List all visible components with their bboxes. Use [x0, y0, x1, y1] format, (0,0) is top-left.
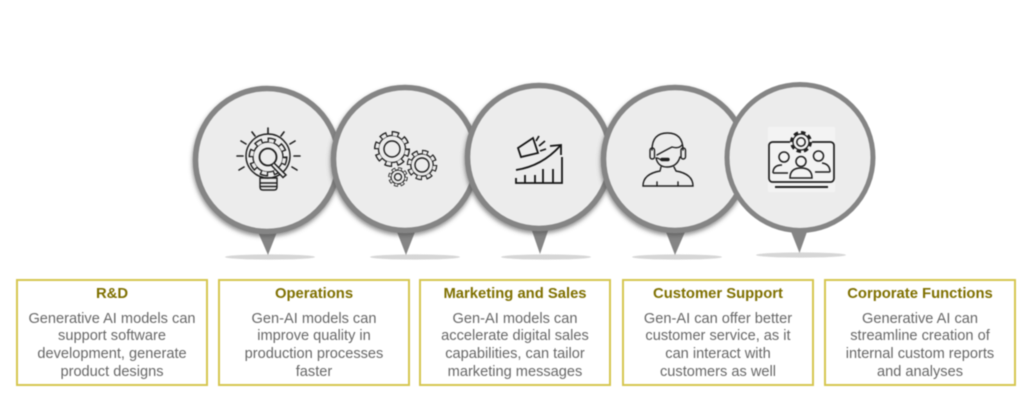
text: Corporate Functions description: and analyses — [877, 364, 963, 380]
text: R&D description — [28, 310, 196, 380]
heading: Operations: Operations — [275, 286, 353, 302]
pin 3: Marketing and Sales — [468, 86, 610, 260]
text: Customer Support description: customer service, as it — [645, 328, 791, 344]
card: R&D — [16, 279, 208, 386]
text: Operations description — [244, 310, 384, 380]
text: Operations description: faster — [296, 364, 332, 380]
pin 2: Operations — [334, 88, 476, 260]
icon: light bulb with gear and magnifier — [237, 128, 300, 190]
text: Corporate Functions description: Generative AI can — [862, 310, 978, 326]
text: R&D description: development, generate — [37, 346, 187, 362]
pin 5: Corporate Functions — [727, 84, 873, 258]
card: Operations — [218, 279, 410, 386]
text: Corporate Functions description: streamline creation of — [850, 328, 990, 344]
text: Customer Support description: customers as well — [660, 364, 776, 380]
text: Customer Support description: Gen-AI can offer better — [644, 310, 792, 326]
card: Customer Support — [622, 279, 814, 386]
text: Marketing and Sales description: accelerate digital sales — [441, 328, 589, 344]
text: Marketing and Sales description: Gen-AI models can — [453, 310, 577, 326]
text: Operations description: improve quality in — [257, 328, 371, 344]
heading: Customer Support: Customer Support — [653, 286, 783, 302]
text: Marketing and Sales description: capabilities, can tailor — [445, 346, 585, 362]
text: Operations description: Gen-AI models can — [252, 310, 376, 326]
text: R&D description: Generative AI models can — [28, 310, 196, 326]
text: Marketing and Sales description — [441, 310, 589, 380]
heading: R&D: R&D — [96, 286, 128, 302]
heading: Marketing and Sales: Marketing and Sales — [443, 286, 587, 302]
text: Marketing and Sales description: marketing messages — [448, 364, 582, 380]
icon: headset agent — [643, 133, 693, 186]
icon: team on screen with gear — [768, 127, 835, 192]
text: Corporate Functions description — [846, 310, 994, 380]
heading: Corporate Functions: Corporate Functions — [847, 286, 993, 302]
pin 1: R&D — [196, 88, 338, 260]
card: Marketing and Sales — [419, 279, 611, 386]
card: Corporate Functions — [824, 279, 1016, 386]
icon: megaphone and growth chart — [516, 136, 562, 183]
text: R&D description: product designs — [60, 364, 164, 380]
text: R&D description: support software — [58, 328, 166, 344]
text: Operations description: production processes — [245, 346, 383, 362]
text: Customer Support description — [644, 310, 792, 380]
text: Customer Support description: can interact with — [665, 346, 771, 362]
icon: three gears — [376, 134, 435, 185]
pin 4: Customer Support — [604, 88, 746, 260]
text: Corporate Functions description: internal custom reports — [846, 346, 994, 362]
